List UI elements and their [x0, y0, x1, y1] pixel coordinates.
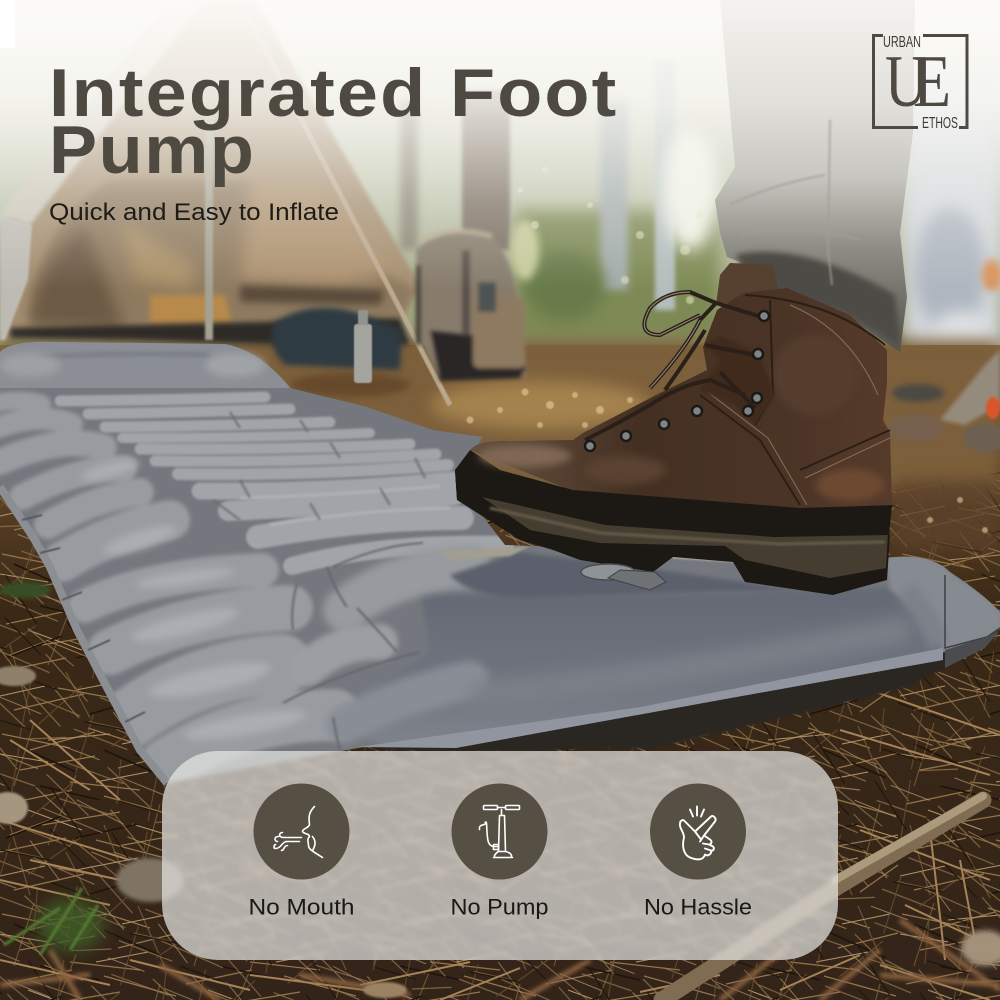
label: No Mouth [248, 894, 355, 920]
bokeh highlights in the foliage [501, 167, 704, 304]
dark sleeping bag [272, 308, 402, 370]
top haze overlay [0, 0, 1000, 290]
mat ribbed edge [0, 487, 167, 783]
lace panel [700, 335, 775, 425]
bolster seam and tip [945, 575, 1000, 648]
feature panel [162, 751, 838, 960]
subtitle: Quick and Easy to Inflate [49, 199, 339, 226]
label: No Hassle [644, 894, 752, 920]
distant ground bokeh [466, 388, 988, 533]
small white corner tab [0, 0, 15, 48]
leather highlights [479, 335, 884, 501]
smoke and far right haze [905, 60, 1000, 379]
pillow section [0, 342, 292, 390]
row highlights and cross seams [213, 412, 450, 525]
mat edge stripe [358, 648, 943, 748]
brand logo: URBAN [883, 34, 921, 51]
boot sole [455, 470, 890, 595]
boot tongue [716, 263, 780, 305]
eyelets [585, 311, 769, 451]
boot stitching [700, 295, 890, 505]
brand logo: U [885, 41, 927, 123]
icon: face blowing air [274, 806, 322, 858]
steel water bottle [354, 310, 372, 383]
mat body [0, 388, 1000, 783]
mat underside shadow [358, 628, 1000, 752]
tuft highlights [79, 455, 308, 746]
blurred foreground needles [0, 920, 1000, 1000]
brand logo [874, 34, 967, 132]
title [49, 56, 618, 188]
feature: no mouth [248, 784, 354, 920]
feature: no pump [450, 784, 548, 920]
soft tuft seams [283, 543, 423, 750]
brand logo: ETHOS [922, 115, 958, 132]
brand logo: E [913, 41, 951, 123]
title: Pump [49, 112, 256, 188]
left side tufts [0, 401, 335, 765]
right bolster [885, 555, 1000, 655]
feature: no hassle [644, 784, 752, 920]
title: Integrated Foot [49, 56, 618, 131]
boot upper [470, 288, 892, 512]
backpack [416, 231, 526, 381]
sleeping mat [0, 342, 1000, 783]
label: No Pump [450, 894, 548, 920]
foot pump valve [581, 564, 666, 590]
foot pump patch [450, 552, 800, 598]
head zone [372, 587, 944, 743]
fallen branch [662, 796, 983, 1000]
campfire logs and flames [887, 350, 1000, 452]
black rand [455, 450, 892, 537]
midsole [482, 497, 888, 578]
moss and leaves on the ground [0, 582, 1000, 998]
trouser leg [715, 0, 915, 352]
laces [585, 292, 765, 440]
soft mat tufts clipped to mat outline [0, 397, 1000, 765]
tent [0, 0, 450, 405]
icon: hand air pump [479, 806, 520, 858]
forest background [0, 0, 1000, 400]
icon: finger snap [680, 806, 716, 859]
head zone puffs [308, 566, 900, 725]
central baffle rows [60, 397, 505, 566]
hiking boot [455, 263, 892, 595]
forest floor with pine needles [0, 340, 1000, 1000]
